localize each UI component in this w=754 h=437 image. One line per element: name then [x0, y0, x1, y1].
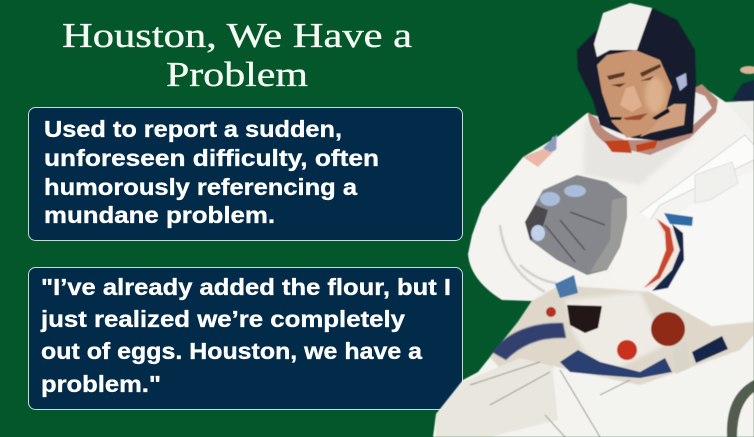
mouth	[623, 113, 648, 120]
lower torso shading	[490, 285, 754, 385]
orange collar connector	[604, 140, 658, 153]
red ball	[617, 340, 637, 360]
red valve left	[546, 307, 556, 317]
example text	[40, 274, 451, 397]
example text: just realized we’re completely	[40, 306, 405, 332]
example text: "I’ve already added the flour, but I	[41, 274, 451, 300]
red connector	[651, 312, 685, 346]
cuff stripes	[644, 219, 674, 288]
astronaut photo	[433, 3, 754, 437]
panel: example	[28, 268, 462, 410]
chest straps	[560, 350, 672, 378]
definition text: humorously referencing a	[44, 174, 357, 200]
panel: definition	[28, 108, 462, 240]
chest pale bib	[565, 292, 665, 372]
brow and eye shadows	[607, 64, 661, 87]
background equipment	[732, 80, 754, 105]
chest pocket	[695, 162, 738, 203]
head base	[577, 7, 696, 141]
cheek highlight	[645, 77, 665, 113]
chest patch	[555, 275, 578, 298]
example text: problem."	[41, 371, 161, 397]
example text: out of eggs. Houston, we have a	[41, 338, 422, 364]
microphone	[610, 108, 670, 120]
title	[62, 16, 413, 94]
shoulder strap	[630, 135, 754, 235]
definition text: mundane problem.	[44, 202, 275, 228]
blue hose	[492, 323, 566, 360]
definition text	[44, 116, 379, 228]
forearm	[610, 205, 672, 290]
left arm folds	[500, 225, 575, 292]
lower suit folds	[436, 358, 558, 437]
wheel	[727, 380, 754, 437]
gloves	[525, 175, 627, 275]
chest connector dark	[567, 305, 602, 333]
torso shadow	[583, 118, 700, 185]
ear piece	[676, 73, 687, 91]
definition text: Used to report a sudden,	[44, 116, 342, 142]
cuff white stripe base	[642, 217, 682, 288]
neck liner white	[597, 92, 712, 140]
face	[597, 50, 672, 138]
helmet cap white	[594, 3, 652, 57]
nose shadow	[620, 86, 642, 112]
suit body	[433, 85, 754, 437]
definition text: unforeseen difficulty, often	[44, 145, 379, 171]
title: Problem	[166, 55, 308, 94]
title: Houston, We Have a	[62, 16, 413, 55]
flag patch	[523, 134, 557, 167]
neck ring	[588, 84, 718, 155]
neck skin	[640, 104, 686, 137]
sleeve	[650, 170, 754, 326]
